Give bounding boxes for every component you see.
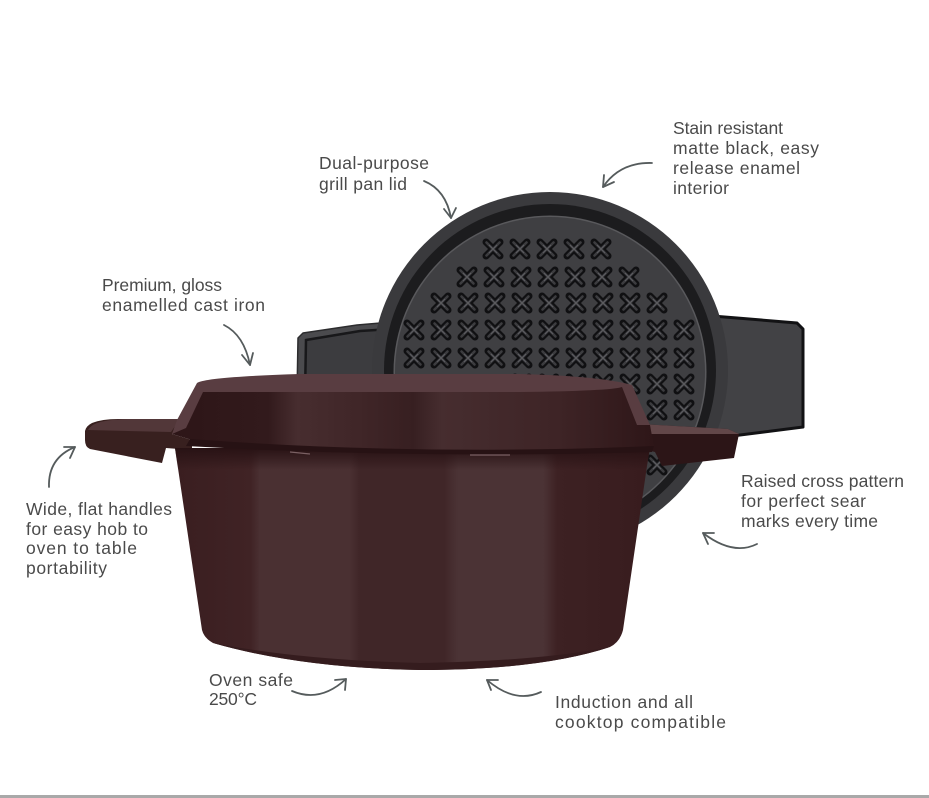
pot handle left	[85, 419, 192, 463]
arrow: enamel interior	[603, 163, 652, 187]
annotation: induction: cooktop compatible	[555, 712, 726, 732]
annotation: enamel interior: interior	[673, 178, 729, 198]
annotation: oven safe: Oven safe	[209, 670, 293, 690]
annotation: enamel interior	[673, 118, 819, 198]
annotation: enamel interior: matte black, easy	[673, 138, 819, 158]
arrow: induction	[487, 680, 541, 696]
lid side	[172, 386, 654, 450]
casserole pot	[85, 374, 739, 670]
pot handle right	[640, 424, 739, 466]
annotation: grill pan lid	[319, 153, 429, 194]
pot base shadow	[213, 643, 610, 670]
rim highlights	[290, 452, 510, 455]
annotation: cross pattern: Raised cross pattern	[741, 471, 904, 491]
annotation: cross pattern	[741, 471, 904, 531]
annotation: handles	[26, 499, 172, 578]
raised cross pattern	[407, 242, 691, 472]
annotation: cross pattern: for perfect sear	[741, 491, 866, 511]
pot body	[175, 448, 650, 670]
arrow: grill pan lid	[424, 181, 456, 218]
annotation: enamel interior: release enamel	[673, 158, 800, 178]
pan rim	[372, 192, 728, 548]
annotation: induction	[555, 692, 726, 732]
annotation: enamel interior: Stain resistant	[673, 118, 783, 138]
annotation: cast iron: Premium, gloss	[102, 275, 222, 295]
arrow: handles	[49, 447, 75, 487]
grill pan lid	[297, 192, 803, 548]
pot upper shading	[175, 448, 650, 470]
annotation: grill pan lid: Dual-purpose	[319, 153, 429, 173]
pan handle right	[700, 315, 803, 440]
annotation: handles: portability	[26, 558, 107, 578]
annotation: oven safe	[209, 670, 293, 709]
annotation: handles: Wide, flat handles	[26, 499, 172, 519]
annotation: grill pan lid: grill pan lid	[319, 174, 407, 194]
annotation: cast iron: enamelled cast iron	[102, 295, 265, 315]
annotation: handles: for easy hob to	[26, 519, 148, 539]
annotation: handles: oven to table	[26, 538, 137, 558]
pan handle left	[297, 322, 392, 395]
arrow: cross pattern	[703, 533, 757, 548]
lid top	[172, 374, 650, 434]
arrow: cast iron	[224, 325, 253, 365]
arrow: oven safe	[292, 679, 346, 695]
annotation: cross pattern: marks every time	[741, 511, 878, 531]
lid rim	[186, 439, 654, 454]
annotation: induction: Induction and all	[555, 692, 693, 712]
annotation: oven safe: 250°C	[209, 689, 257, 709]
annotation: cast iron	[102, 275, 265, 315]
